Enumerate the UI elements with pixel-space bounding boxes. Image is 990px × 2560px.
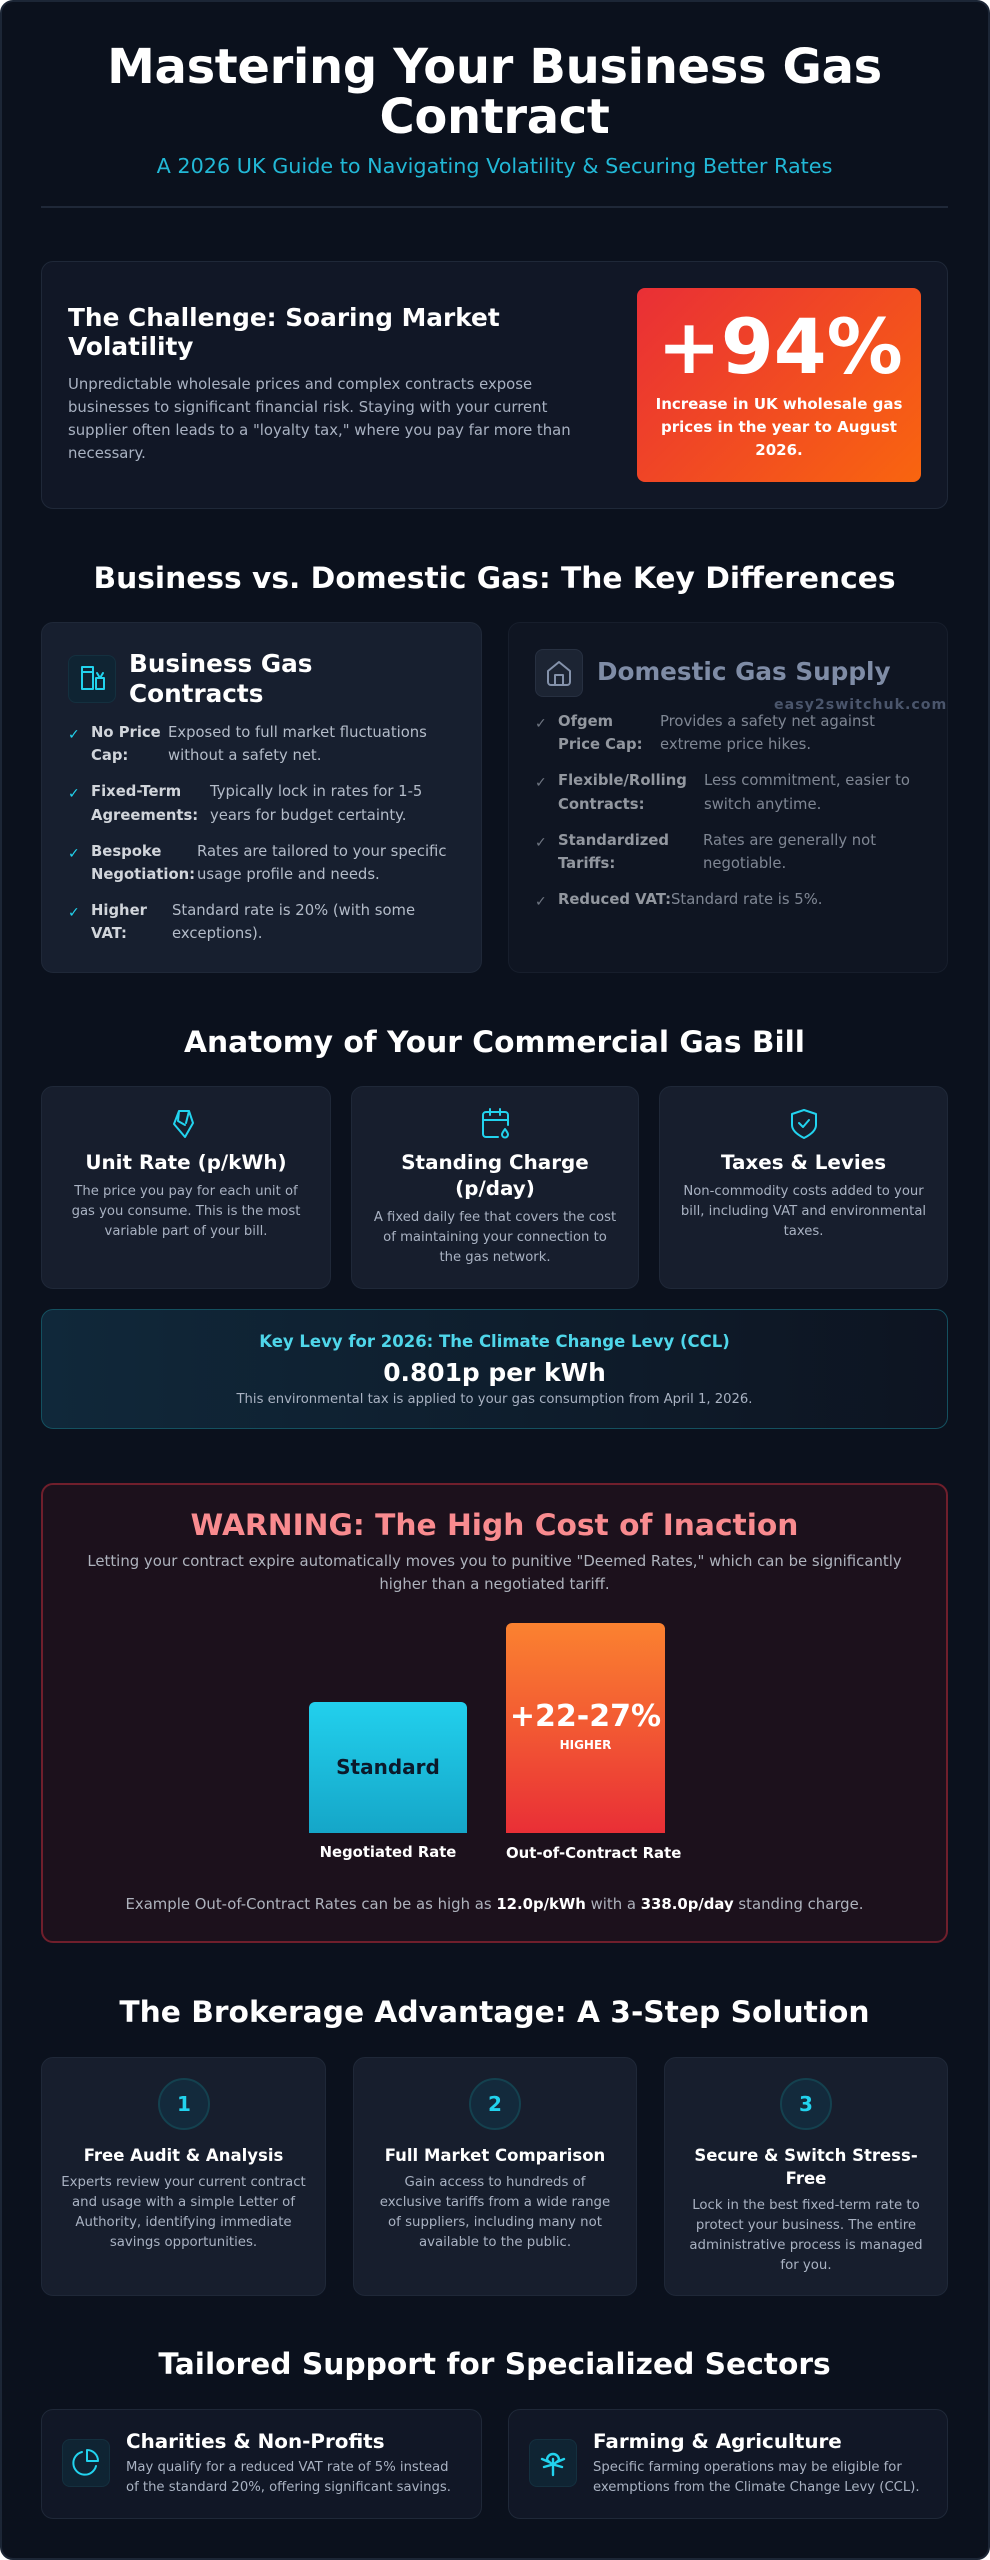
item: standardized	[535, 832, 876, 872]
step 1 title: Free Audit & Analysis	[84, 2146, 283, 2165]
step number 2	[469, 2078, 521, 2130]
bar label: standard: Standard	[336, 1755, 440, 1779]
title	[107, 39, 882, 145]
panel: standing charge	[351, 1086, 639, 1289]
item: ofgem: Ofgem	[558, 713, 613, 730]
item: fixed-term: Fixed-Term	[91, 783, 181, 800]
item: standardized: Rates are generally not	[703, 832, 876, 849]
item: ofgem: Provides a safety net against	[660, 713, 875, 730]
item: bespoke: ✓	[68, 846, 80, 862]
step 2 title: Full Market Comparison	[385, 2146, 605, 2165]
list: business features	[68, 724, 447, 942]
unit rate text	[72, 1184, 300, 1239]
item: standardized: negotiable.	[703, 855, 786, 872]
taxes title: Taxes & Levies	[721, 1151, 886, 1174]
stat caption: prices in the year to August	[661, 418, 897, 436]
taxes text: taxes.	[784, 1224, 823, 1239]
step 1 text: savings opportunities.	[110, 2235, 257, 2250]
watermark: easy2switchuk.com	[774, 697, 947, 713]
item: flexible: Less commitment, easier to	[704, 772, 910, 789]
standing charge text	[374, 1210, 616, 1265]
header	[41, 30, 948, 208]
item: bespoke: Bespoke	[91, 843, 161, 860]
item: higher vat: exceptions).	[172, 925, 263, 942]
axis label: out-of-contract: Out-of-Contract Rate	[506, 1844, 681, 1862]
stat caption: Increase in UK wholesale gas	[656, 395, 902, 413]
bar chart	[309, 1623, 681, 1862]
item: standardized: ✓	[535, 835, 547, 851]
item: reduced vat: ✓	[535, 894, 547, 910]
item: reduced vat	[535, 891, 822, 910]
item: flexible: Contracts:	[558, 796, 644, 813]
item: flexible: Flexible/Rolling	[558, 772, 687, 789]
farming title: Farming & Agriculture	[593, 2430, 842, 2453]
challenge text: businesses to significant financial risk. Staying with your current	[68, 398, 547, 416]
heading: business vs domestic: Business vs. Domestic Gas: The Key Differences	[93, 561, 896, 596]
step 3 text: administrative process is managed	[689, 2238, 923, 2253]
taxes text: bill, including VAT and environmental	[681, 1204, 926, 1219]
standing charge title	[401, 1151, 589, 1200]
bar: negotiated rate	[309, 1702, 467, 1833]
item: reduced vat: Standard rate is 5%.	[671, 891, 822, 908]
panel: business gas contracts	[41, 622, 482, 973]
item: bespoke: Negotiation:	[91, 866, 195, 883]
item: bespoke: usage profile and needs.	[197, 866, 380, 883]
axis label: negotiated: Negotiated Rate	[320, 1844, 456, 1861]
step number 1	[158, 2078, 210, 2130]
item: no price cap: No Price	[91, 724, 161, 741]
business heading: Business Gas	[129, 649, 312, 678]
standing charge text: the gas network.	[439, 1250, 551, 1265]
item: ofgem: Price Cap:	[558, 736, 643, 753]
unit rate title: Unit Rate (p/kWh)	[85, 1151, 287, 1174]
heading: specialized sectors: Tailored Support for Specialized Sectors	[158, 2347, 831, 2382]
step 3 text: protect your business. The entire	[696, 2218, 916, 2233]
subtitle: A 2026 UK Guide to Navigating Volatility & Securing Better Rates	[157, 154, 832, 178]
standing charge text: of maintaining your connection to	[383, 1230, 607, 1245]
stat caption	[656, 395, 902, 459]
farming text: Specific farming operations may be eligible for	[593, 2460, 902, 2475]
list: domestic features	[535, 713, 910, 910]
step 3 title: Secure & Switch Stress-	[694, 2146, 918, 2165]
stat callout: +94%	[637, 288, 921, 482]
item: flexible: switch anytime.	[704, 796, 821, 813]
item: no price cap	[68, 724, 427, 764]
unit rate text: The price you pay for each unit of	[74, 1184, 298, 1199]
item: bespoke	[68, 843, 447, 883]
panel: charities	[41, 2409, 482, 2519]
charities text: May qualify for a reduced VAT rate of 5% instead	[126, 2460, 449, 2475]
item: standardized: Tariffs:	[558, 855, 615, 872]
panel: farming	[508, 2409, 948, 2519]
warning text: Letting your contract expire automatically moves you to punitive "Deemed Rates," which can be significantly	[87, 1552, 902, 1570]
step 3 text	[689, 2198, 923, 2273]
item: fixed-term: years for budget certainty.	[210, 807, 406, 824]
item: higher vat: Higher	[91, 902, 147, 919]
business heading: Contracts	[129, 679, 263, 708]
warning footnote: Example Out-of-Contract Rates can be as high as 12.0p/kWh with a 338.0p/day standing charge.	[126, 1895, 863, 1913]
business heading	[129, 649, 312, 708]
icon: house	[535, 649, 583, 697]
step 2 text	[380, 2175, 610, 2250]
standing charge title: (p/day)	[455, 1177, 535, 1200]
farming text	[593, 2460, 920, 2495]
panel: step 1	[41, 2057, 326, 2296]
item: no price cap: Exposed to full market fluctuations	[168, 724, 427, 741]
challenge text: necessary.	[68, 444, 146, 462]
levy note: This environmental tax is applied to your gas consumption from April 1, 2026.	[236, 1392, 752, 1407]
taxes text	[681, 1184, 926, 1239]
levy label: Key Levy for 2026: The Climate Change Levy (CCL)	[259, 1332, 730, 1351]
challenge text: supplier often leads to a "loyalty tax," where you pay far more than	[68, 421, 571, 439]
icon: business building	[68, 655, 116, 703]
panel: step 3	[664, 2057, 948, 2296]
step number 3: 3	[799, 2092, 813, 2116]
step 2 text: Gain access to hundreds of	[405, 2175, 585, 2190]
item: no price cap: ✓	[68, 727, 80, 743]
bar value: +22-27%	[510, 1699, 661, 1734]
charities text	[126, 2460, 451, 2495]
step 1 text: and usage with a simple Letter of	[72, 2195, 295, 2210]
item: higher vat	[68, 902, 415, 942]
unit rate text: gas you consume. This is the most	[72, 1204, 300, 1219]
panel: unit rate	[41, 1086, 331, 1289]
item: no price cap: Cap:	[91, 747, 128, 764]
charities text: of the standard 20%, offering significant savings.	[126, 2480, 451, 2495]
icon: flame gem	[173, 1110, 194, 1138]
step 2 text: exclusive tariffs from a wide range	[380, 2195, 610, 2210]
item: bespoke: Rates are tailored to your specific	[197, 843, 447, 860]
panel: the challenge	[41, 261, 948, 509]
panel: domestic gas supply	[508, 622, 948, 973]
step number 3	[780, 2078, 832, 2130]
challenge heading	[68, 303, 500, 361]
step 1 text: Authority, identifying immediate	[75, 2215, 292, 2230]
item: higher vat: ✓	[68, 905, 80, 921]
challenge text: Unpredictable wholesale prices and complex contracts expose	[68, 375, 532, 393]
item: no price cap: without a safety net.	[168, 747, 321, 764]
heading: anatomy: Anatomy of Your Commercial Gas Bill	[184, 1025, 805, 1060]
standing charge text: A fixed daily fee that covers the cost	[374, 1210, 616, 1225]
challenge heading: Volatility	[68, 332, 193, 361]
challenge heading: The Challenge: Soaring Market	[68, 303, 500, 332]
item: flexible	[535, 772, 910, 813]
charities title: Charities & Non-Profits	[126, 2430, 385, 2453]
panel: warning	[41, 1483, 948, 1943]
item: higher vat: VAT:	[91, 925, 127, 942]
domestic heading: Domestic Gas Supply	[597, 657, 891, 686]
step 3 text: Lock in the best fixed-term rate to	[692, 2198, 920, 2213]
item: fixed-term: Agreements:	[91, 807, 198, 824]
step 3 text: for you.	[780, 2258, 832, 2273]
stat caption: 2026.	[755, 441, 803, 459]
item: higher vat: Standard rate is 20% (with some	[172, 902, 415, 919]
title: Contract	[380, 89, 609, 145]
item: fixed-term	[68, 783, 422, 824]
step 2 text: of suppliers, including many not	[388, 2215, 602, 2230]
warning text	[87, 1552, 902, 1593]
warning text: higher than a negotiated tariff.	[379, 1575, 610, 1593]
stat number: +94%	[657, 302, 903, 391]
bar value caption: HIGHER	[560, 1738, 611, 1752]
item: standardized: Standardized	[558, 832, 669, 849]
step 1 text: Experts review your current contract	[61, 2175, 306, 2190]
heading: brokerage advantage: The Brokerage Advantage: A 3-Step Solution	[119, 1995, 870, 2030]
title: Mastering Your Business Gas	[107, 39, 882, 95]
step 3 title: Free	[786, 2169, 826, 2188]
panel: step 2	[353, 2057, 637, 2296]
item: fixed-term: Typically lock in rates for 1-5	[210, 783, 422, 800]
bar: out-of-contract rate	[506, 1623, 665, 1833]
panel: taxes and levies	[659, 1086, 948, 1289]
item: flexible: ✓	[535, 775, 547, 791]
icon: pie chart	[62, 2439, 110, 2487]
step number 2: 2	[488, 2092, 502, 2116]
warning heading: WARNING: The High Cost of Inaction	[191, 1508, 798, 1543]
step number 1: 1	[177, 2092, 191, 2116]
levy value: 0.801p per kWh	[383, 1358, 606, 1387]
item: ofgem: ✓	[535, 716, 547, 732]
unit rate text: variable part of your bill.	[105, 1224, 267, 1239]
callout: climate change levy	[41, 1309, 948, 1429]
challenge text	[68, 375, 571, 462]
taxes text: Non-commodity costs added to your	[683, 1184, 924, 1199]
icon: calendar	[482, 1108, 509, 1138]
item: ofgem: extreme price hikes.	[660, 736, 811, 753]
item: ofgem	[535, 713, 875, 753]
step 1 text	[61, 2175, 306, 2250]
item: reduced vat: Reduced VAT:	[558, 891, 671, 908]
step 3 title	[694, 2146, 918, 2188]
item: fixed-term: ✓	[68, 786, 80, 802]
step 2 text: available to the public.	[419, 2235, 571, 2250]
icon: leaf	[529, 2439, 577, 2487]
icon: shield	[791, 1109, 817, 1139]
farming text: exemptions from the Climate Change Levy (CCL).	[593, 2480, 920, 2495]
standing charge title: Standing Charge	[401, 1151, 589, 1174]
